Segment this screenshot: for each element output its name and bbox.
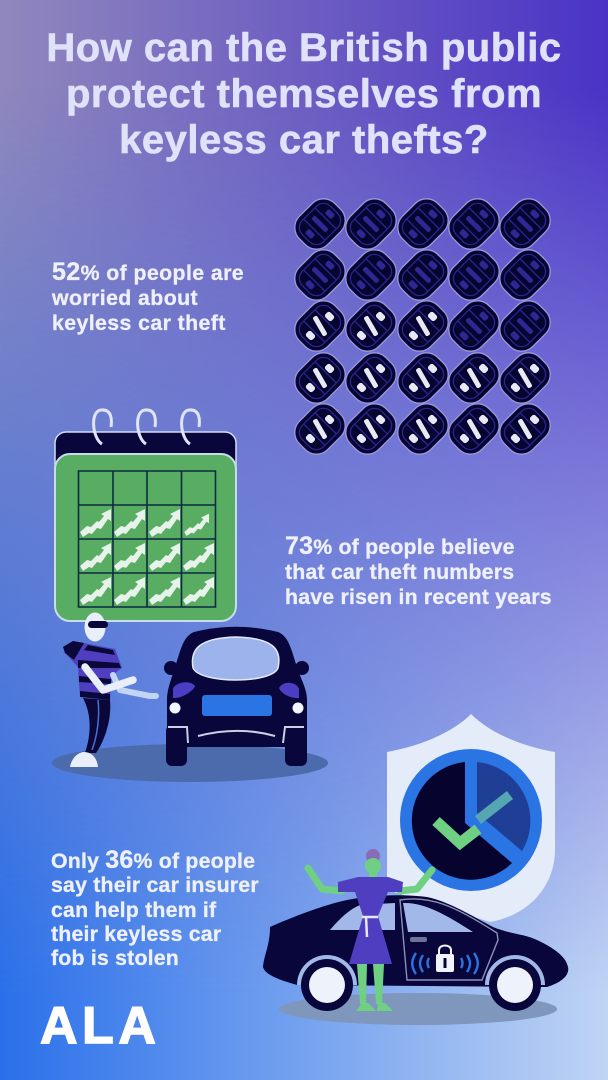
title: How can the British public	[46, 26, 562, 70]
title	[46, 26, 562, 162]
stat text: 36%: say their car insurer	[51, 873, 259, 897]
shield with pie chart	[387, 714, 555, 922]
title: protect themselves from	[66, 72, 542, 116]
woman	[308, 849, 432, 1011]
stat text: 73%	[285, 532, 552, 609]
calendar	[55, 410, 236, 621]
icon: padlock	[436, 946, 454, 972]
stat text: 36%: fob is stolen	[51, 946, 179, 970]
stat text: 36%	[51, 846, 259, 970]
ground shadow: hatchback	[279, 993, 557, 1025]
stat text: 52%	[52, 258, 244, 335]
car rear view	[164, 627, 309, 766]
stat text: 73%: have risen in recent years	[285, 585, 552, 609]
logo: ALA	[40, 997, 160, 1055]
stat text: 36%: their keyless car	[51, 922, 221, 946]
stat text: 52%: worried about	[52, 286, 198, 310]
stat text: 52%: 52% of people are	[52, 258, 244, 286]
stat text: 36%: can help them if	[51, 898, 216, 922]
stat text: 36%: Only 36% of people	[51, 846, 255, 874]
thief	[63, 612, 156, 767]
stat text: 73%: that car theft numbers	[285, 560, 514, 584]
side-view car	[263, 895, 568, 1011]
key fob grid	[288, 192, 557, 461]
title: keyless car thefts?	[119, 118, 489, 162]
ground shadow: thief and car	[52, 744, 328, 782]
stat text: 52%: keyless car theft	[52, 311, 226, 335]
stat text: 73%: 73% of people believe	[285, 532, 515, 560]
